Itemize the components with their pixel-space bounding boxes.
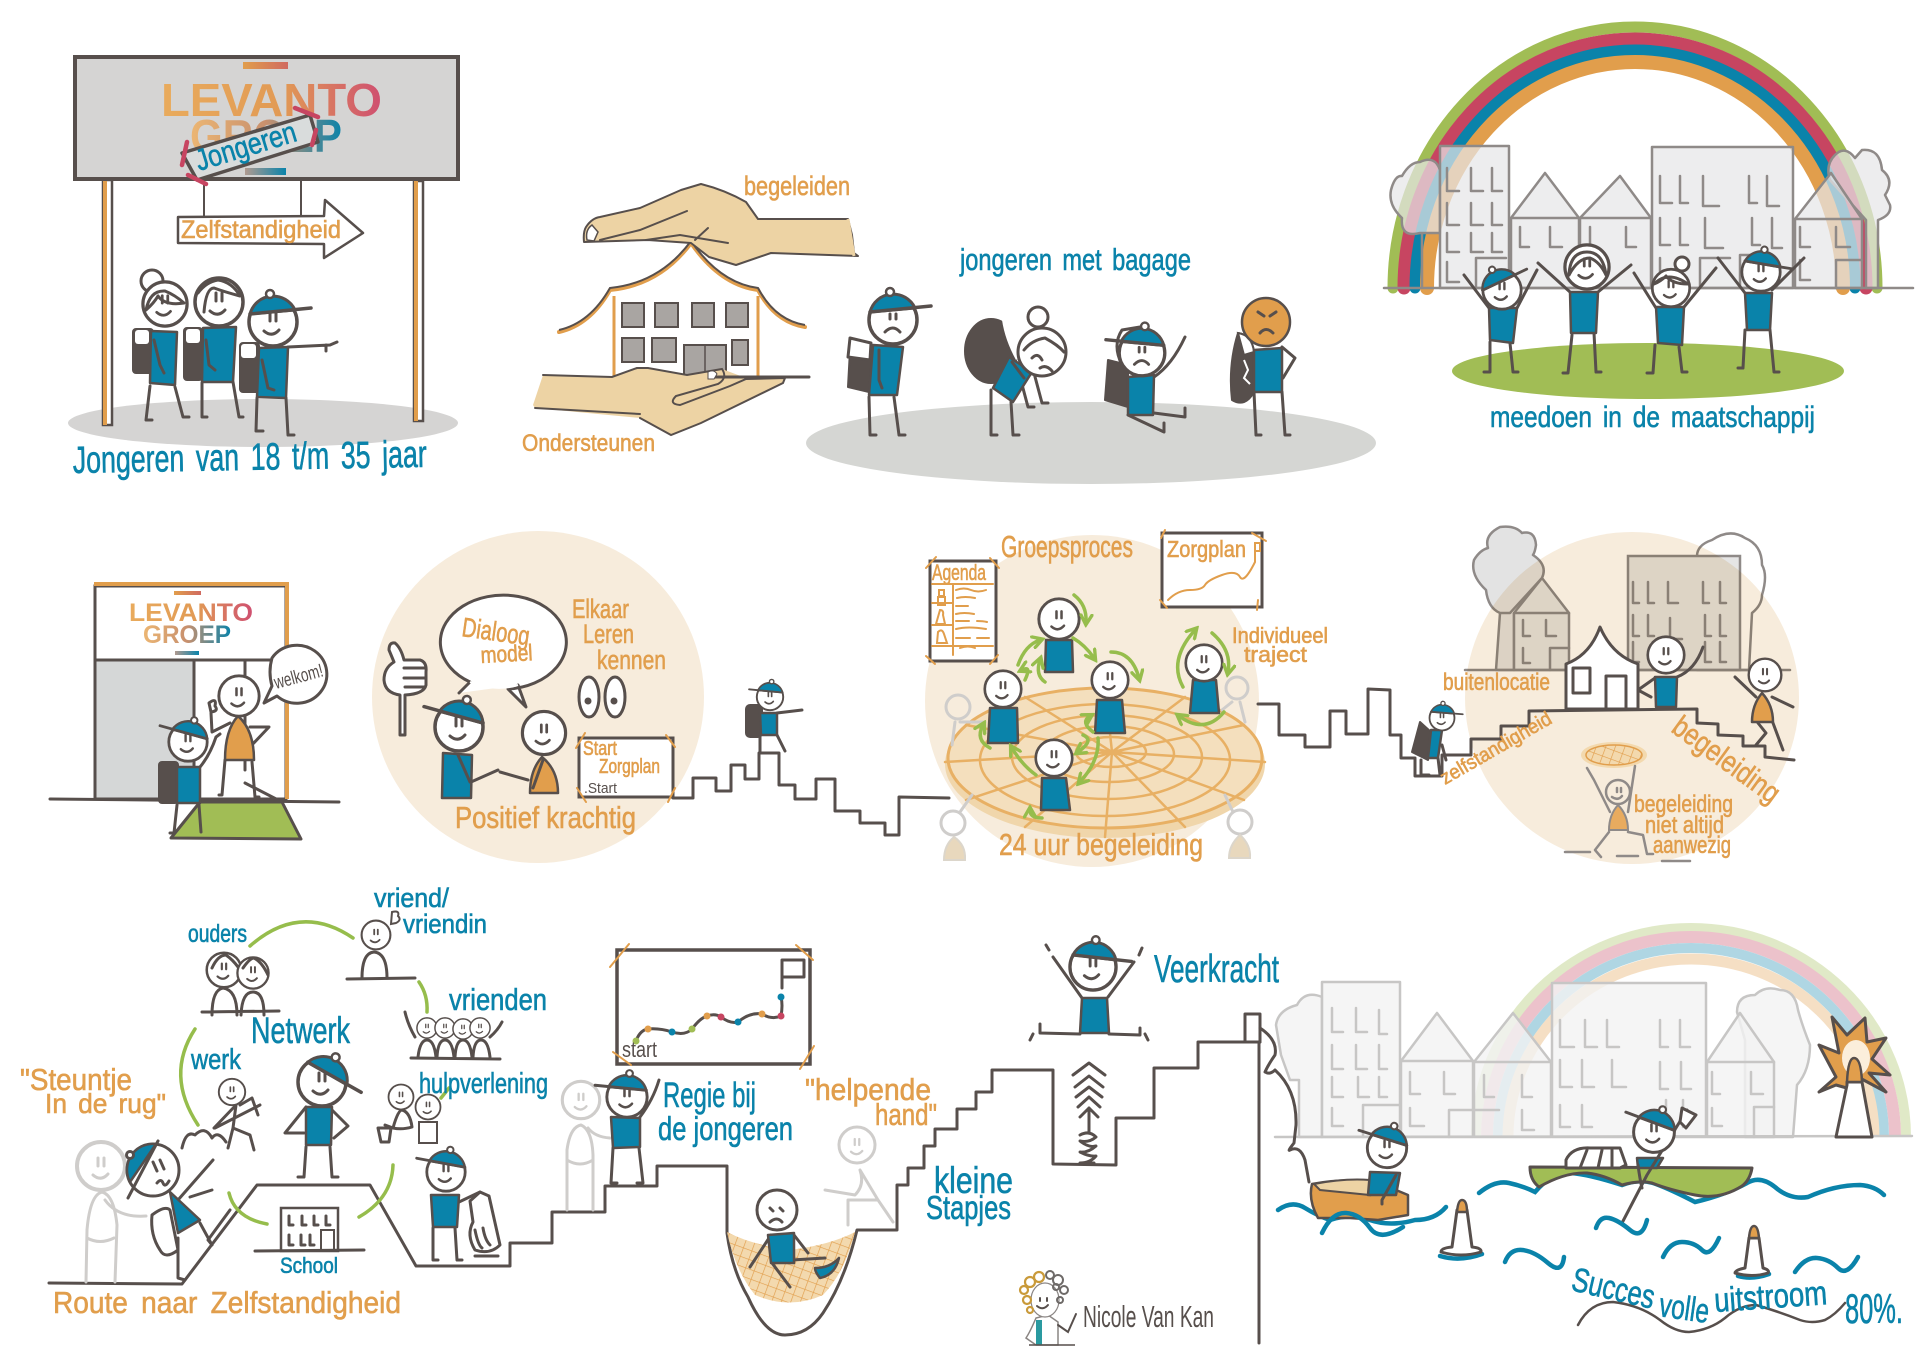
figure: sitting boy bbox=[1105, 323, 1185, 432]
icon: school bbox=[255, 1208, 364, 1251]
figure: boy at board bbox=[595, 1070, 659, 1183]
figure: boy arriving bbox=[159, 712, 220, 833]
poster: agenda bbox=[926, 557, 999, 664]
faded city bbox=[1275, 982, 1912, 1137]
icon: exploding lighthouse buoy bbox=[1819, 1017, 1890, 1137]
heading: groepsproces: Groepsproces bbox=[1001, 529, 1133, 564]
rainbow bbox=[1393, 27, 1877, 288]
figure: climbing boy bbox=[126, 1141, 230, 1280]
figure: welcoming staff bbox=[209, 676, 269, 797]
figure: vriend bbox=[347, 912, 415, 979]
staircase one with walker bbox=[673, 679, 949, 835]
label: vriend/vriendin bbox=[374, 883, 487, 939]
arrow sign: zelfstandigheid: Zelfstandigheid bbox=[181, 216, 341, 244]
icon: thumbs up bbox=[384, 643, 426, 735]
figure: cheering boy bbox=[1464, 256, 1537, 372]
house bbox=[559, 241, 805, 377]
caption: 24 uur begeleiding: 24 uur begeleiding bbox=[999, 827, 1203, 862]
stairs bbox=[1258, 689, 1794, 776]
main route staircase bbox=[49, 1042, 1260, 1335]
scene: entrance welcome bbox=[50, 584, 339, 839]
figure: angry orange-headed youth bbox=[1231, 298, 1295, 435]
text: veerkracht: Veerkracht bbox=[1154, 948, 1279, 991]
background circle bbox=[1465, 532, 1799, 864]
figure: ghost helper bbox=[77, 1142, 146, 1282]
text: helpende hand bbox=[805, 1072, 937, 1132]
figure: jumping boy bbox=[1030, 932, 1148, 1040]
net in the pit bbox=[727, 1232, 855, 1302]
scene: successful outflow bbox=[1245, 928, 1912, 1343]
buoy right bbox=[1735, 1226, 1769, 1278]
long wave bbox=[1479, 1173, 1884, 1202]
background circle bbox=[925, 535, 1259, 867]
text: helpende hand: hand" bbox=[875, 1097, 937, 1132]
text: elkaar leren kennen: Elkaar bbox=[572, 594, 629, 624]
figures: handshake bbox=[423, 689, 566, 798]
icon: eyes bbox=[579, 677, 625, 717]
sign board: GROEP bbox=[190, 110, 342, 162]
text: begeleiding niet altijd aanwezig: begeleiding bbox=[1634, 791, 1733, 818]
text: kleine stapjes: kleine bbox=[934, 1160, 1013, 1201]
caption: succesvolle uitstroom 80%: volle bbox=[1657, 1286, 1712, 1331]
heading: individueel traject bbox=[1232, 623, 1328, 667]
icon: nicole portrait bbox=[1020, 1271, 1076, 1345]
scene: rainbow and society bbox=[1384, 27, 1913, 434]
label: vriend/vriendin: vriendin bbox=[403, 909, 487, 939]
figure: ghost helping hand bbox=[825, 1127, 893, 1225]
caption: jongeren van 18 t/m 35 jaar: Jongeren van 18 t/m 35 jaar bbox=[72, 434, 427, 482]
goal post and rope bbox=[1245, 1014, 1309, 1343]
figure: boy with mop bbox=[416, 1144, 500, 1260]
figure: fallen boy bbox=[750, 1190, 839, 1287]
text: regie bij de jongeren bbox=[658, 1076, 793, 1147]
text: positief krachtig: Positief krachtig bbox=[455, 800, 636, 835]
figure: cheering girl bbox=[1634, 257, 1716, 373]
label: vriend/vriendin: vriend/ bbox=[374, 883, 449, 913]
text: elkaar leren kennen: kennen bbox=[597, 645, 666, 675]
figure: digging worker bbox=[182, 1079, 260, 1150]
background circle bbox=[372, 531, 704, 863]
upper hand bbox=[584, 184, 858, 265]
figures: hulpverlening bbox=[378, 1085, 440, 1143]
figure: waving staff teal bbox=[1638, 637, 1703, 707]
label: ondersteunen: Ondersteunen bbox=[522, 430, 655, 457]
scene: buitenlocatie background bbox=[1465, 527, 1799, 864]
figure: small boy climbing bbox=[1412, 700, 1464, 775]
text: regie bij de jongeren: Regie bij bbox=[663, 1076, 756, 1115]
safety net disc bbox=[945, 687, 1265, 838]
logo: levanto groep: LEVANTO bbox=[129, 599, 253, 627]
text: regie bij de jongeren: de jongeren bbox=[658, 1110, 793, 1147]
board with plan: start bbox=[622, 1037, 657, 1062]
figure: sad boy with backpack bbox=[848, 288, 931, 435]
heading: jongeren met bagage: jongeren met bagage bbox=[959, 242, 1191, 277]
speech bubble: dialoog model: Dialoog bbox=[460, 612, 532, 651]
lower hand bbox=[533, 368, 809, 435]
building doorway bbox=[50, 584, 339, 802]
scene: regie bij de jongeren bbox=[562, 932, 1279, 1345]
figure: pointing boy with cap bbox=[240, 290, 337, 435]
label: buitenlocatie: buitenlocatie bbox=[1443, 669, 1550, 696]
buoy left bbox=[1440, 1200, 1482, 1259]
ghost supporters bbox=[941, 677, 1252, 860]
decorative wave under text bbox=[1578, 1302, 1845, 1332]
caption: meedoen in de maatschappij: meedoen in de maatschappij bbox=[1490, 401, 1815, 434]
poster: zorgplan: Zorgplan bbox=[1167, 536, 1246, 562]
staircase two with buitenlocatie bbox=[1258, 627, 1794, 861]
small waves bbox=[1505, 1218, 1858, 1272]
text: helpende hand: "helpende bbox=[805, 1072, 931, 1107]
speech bubble: dialoog model bbox=[440, 595, 566, 707]
text: begeleiding niet altijd aanwezig bbox=[1634, 791, 1733, 859]
figure: kayaker in green boat bbox=[1530, 1097, 1752, 1223]
poster: start zorgplan: .Start bbox=[584, 780, 618, 797]
caption: route naar zelfstandigheid: Route naar Zelfstandigheid bbox=[53, 1285, 401, 1320]
caption: succesvolle uitstroom 80%: Succes bbox=[1568, 1261, 1659, 1317]
text: elkaar leren kennen: Leren bbox=[583, 619, 634, 649]
figure: ghost supporter bbox=[562, 1081, 610, 1210]
poster: agenda: Agenda bbox=[932, 560, 987, 585]
speech bubble: welkom bbox=[264, 645, 327, 703]
panel: groepsproces circle bbox=[925, 529, 1328, 867]
ground shadow bbox=[806, 402, 1376, 484]
caption: succesvolle uitstroom 80% bbox=[1568, 1261, 1903, 1332]
poster: start zorgplan: Start bbox=[583, 738, 617, 760]
label: vrienden: vrienden bbox=[449, 982, 547, 1017]
arrow sign: zelfstandigheid bbox=[178, 200, 363, 258]
icon: small net held up bbox=[1581, 742, 1647, 768]
figure: bent girl under big backpack bbox=[965, 307, 1066, 435]
stairs bbox=[673, 753, 949, 835]
sign posts bbox=[103, 180, 423, 425]
city skyline bbox=[1384, 146, 1913, 288]
green doormat bbox=[171, 802, 301, 839]
caption: succesvolle uitstroom 80%: uitstroom bbox=[1713, 1274, 1828, 1320]
ground shadow bbox=[68, 399, 458, 447]
white tent house bbox=[1566, 627, 1638, 709]
text: steuntje in de rug: In de rug" bbox=[45, 1088, 166, 1119]
icon: spring with chevrons bbox=[1073, 1063, 1105, 1163]
logo: levanto groep: GROEP bbox=[143, 621, 231, 649]
speech bubble: welkom: welkom! bbox=[271, 661, 326, 694]
label: begeleiden: begeleiden bbox=[744, 171, 850, 201]
text: steuntje in de rug: "Steuntje bbox=[20, 1062, 132, 1097]
label: zelfstandigheid: zelfstandigheid bbox=[1436, 708, 1556, 789]
figure: waving staff orange bbox=[1735, 659, 1793, 750]
label: hulpverlening: hulpverlening bbox=[419, 1068, 548, 1100]
label: begeleiding: begeleiding bbox=[1666, 710, 1786, 810]
signature: nicole van kan: Nicole Van Kan bbox=[1083, 1299, 1214, 1334]
text: elkaar leren kennen bbox=[572, 594, 666, 675]
group figures bbox=[985, 599, 1222, 810]
green process arrows bbox=[980, 595, 1229, 818]
heading: individueel traject: Individueel bbox=[1232, 623, 1328, 648]
figure: cheering boy with cap bbox=[1718, 243, 1804, 372]
heading: individueel traject: traject bbox=[1244, 642, 1307, 667]
green field bbox=[1452, 343, 1844, 399]
poster: start zorgplan bbox=[576, 733, 675, 802]
figure: girl with bun bbox=[133, 270, 189, 420]
logo: levanto groep bbox=[129, 591, 253, 655]
speech bubble: dialoog model: model bbox=[480, 639, 533, 668]
board with plan bbox=[610, 944, 814, 1069]
figure: boy bbox=[184, 278, 243, 417]
figure: person holding net bbox=[1565, 766, 1690, 861]
label: ouders: ouders bbox=[188, 920, 247, 948]
wave in front of boat bbox=[1322, 1213, 1403, 1235]
figures: vrienden bbox=[405, 1012, 502, 1059]
figure: cheering boy with hair bbox=[1538, 245, 1631, 373]
poster: start zorgplan: Zorgplan bbox=[599, 756, 660, 778]
text: kleine stapjes bbox=[926, 1160, 1013, 1226]
text: kleine stapjes: Stapjes bbox=[926, 1189, 1011, 1226]
sign board bbox=[75, 57, 458, 179]
text: steuntje in de rug bbox=[20, 1062, 166, 1119]
label: school: School bbox=[280, 1253, 338, 1278]
scene: hands protecting the house bbox=[522, 171, 858, 457]
poster: zorgplan bbox=[1160, 530, 1266, 610]
figure: center boy bbox=[285, 1043, 371, 1177]
figures: ouders bbox=[202, 953, 279, 1015]
heading: netwerk: Netwerk bbox=[251, 1010, 350, 1051]
scene: levanto sign and young people bbox=[68, 57, 458, 482]
tree and buildings bbox=[1465, 527, 1790, 670]
wave group around orange boat bbox=[1278, 1204, 1446, 1224]
hanging ropes bbox=[204, 180, 301, 216]
faded rainbow bbox=[1476, 928, 1906, 1137]
panel: netwerk bbox=[20, 883, 548, 1320]
panel: kennismaking circle bbox=[372, 531, 704, 863]
green network connectors bbox=[181, 922, 449, 1224]
figure: boy in orange boat bbox=[1311, 1116, 1411, 1220]
text: begeleiding niet altijd aanwezig: niet altijd bbox=[1645, 812, 1724, 839]
figure: walking boy bbox=[746, 679, 802, 753]
label: werk: werk bbox=[190, 1044, 241, 1076]
scene: jongeren met bagage bbox=[806, 242, 1376, 484]
sign board: LEVANTO bbox=[161, 74, 382, 126]
text: begeleiding niet altijd aanwezig: aanwezig bbox=[1653, 832, 1731, 859]
jongeren tag: Jongeren bbox=[191, 116, 301, 178]
